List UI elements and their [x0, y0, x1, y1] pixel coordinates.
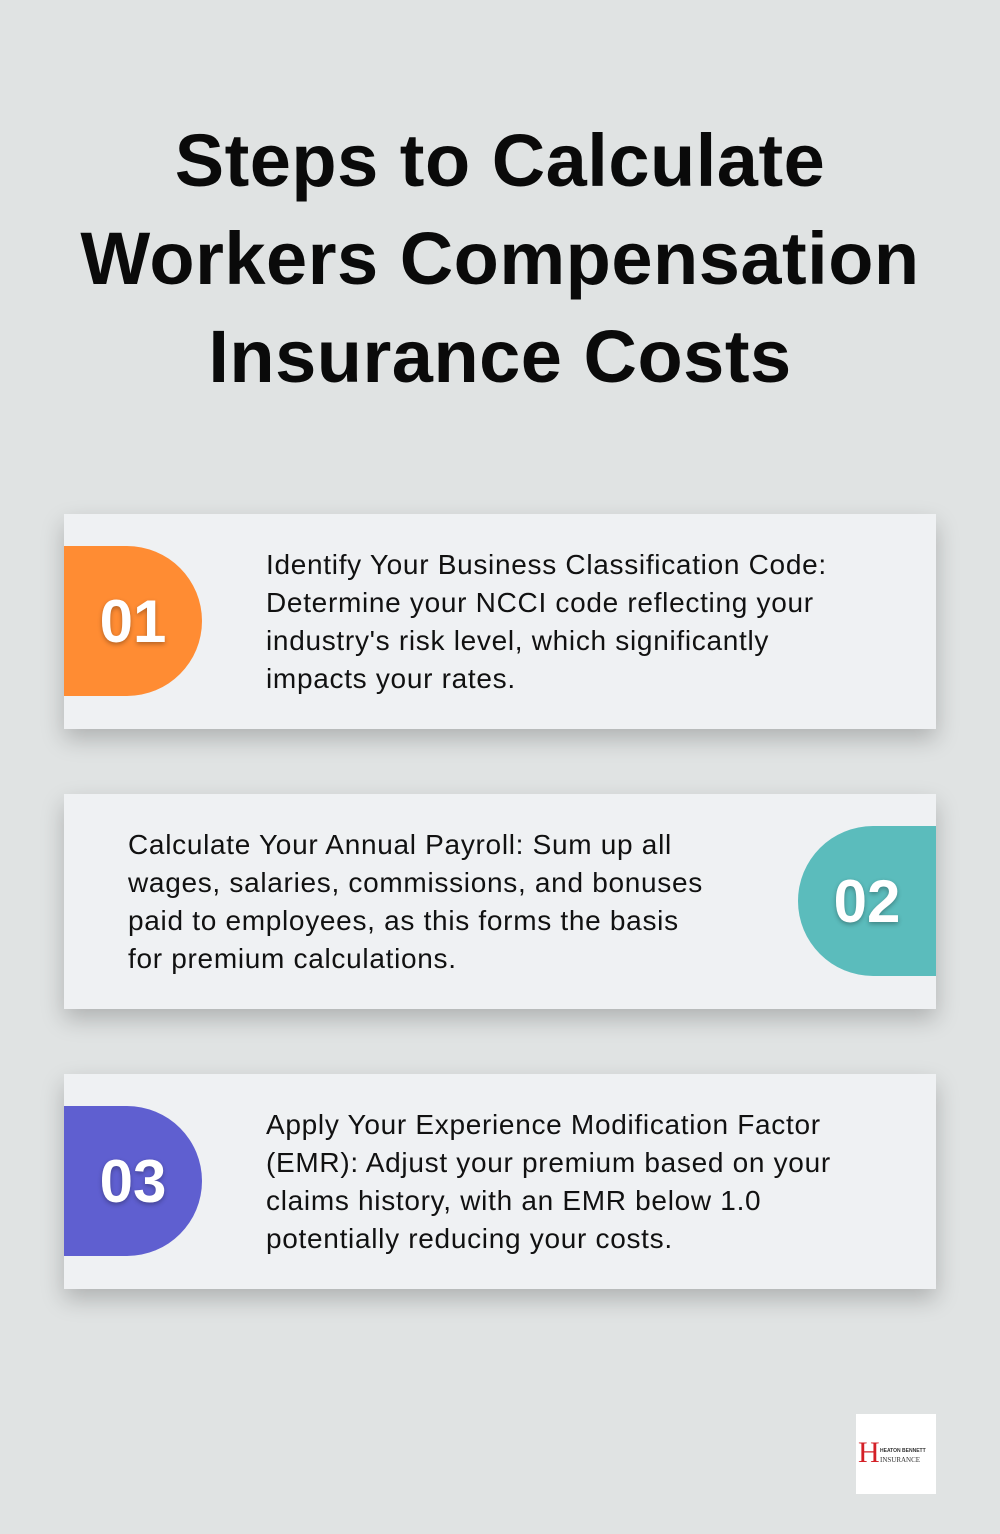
text step 3: Apply Your Experience Modification Factor: [266, 1109, 821, 1140]
badge 02: 02: [834, 868, 900, 934]
logo: [856, 1414, 936, 1494]
text step 1: impacts your rates.: [266, 663, 516, 694]
title: Insurance Costs: [208, 315, 792, 398]
text step 1: industry's risk level, which significantly: [266, 625, 769, 656]
text step 1: Identify Your Business Classification Code:: [266, 549, 827, 580]
text step 2: wages, salaries, commissions, and bonuses: [128, 867, 703, 898]
title: Workers Compensation: [80, 217, 920, 300]
logo: INSURANCE: [880, 1456, 920, 1464]
panel: step 3: [64, 1074, 936, 1289]
panel: step 2: [64, 794, 936, 1009]
logo: H: [858, 1436, 880, 1469]
badge 03: 03: [100, 1148, 166, 1214]
text step 2: paid to employees, as this forms the basis: [128, 905, 679, 936]
title: [80, 119, 920, 398]
text step 2: Calculate Your Annual Payroll: Sum up all: [128, 829, 672, 860]
badge 01: 01: [100, 588, 166, 654]
text step 3: (EMR): Adjust your premium based on your: [266, 1147, 831, 1178]
badge 01: [64, 546, 202, 696]
panel: step 1: [64, 514, 936, 729]
badge 03: [64, 1106, 202, 1256]
text step 1: [266, 549, 827, 694]
text step 1: Determine your NCCI code reflecting your: [266, 587, 814, 618]
text step 3: [266, 1109, 831, 1254]
logo: HEATON BENNETT: [880, 1448, 926, 1454]
title: Steps to Calculate: [175, 119, 825, 202]
badge 02: [798, 826, 936, 976]
text step 3: claims history, with an EMR below 1.0: [266, 1185, 761, 1216]
text step 2: [128, 829, 703, 974]
text step 3: potentially reducing your costs.: [266, 1223, 673, 1254]
text step 2: for premium calculations.: [128, 943, 457, 974]
